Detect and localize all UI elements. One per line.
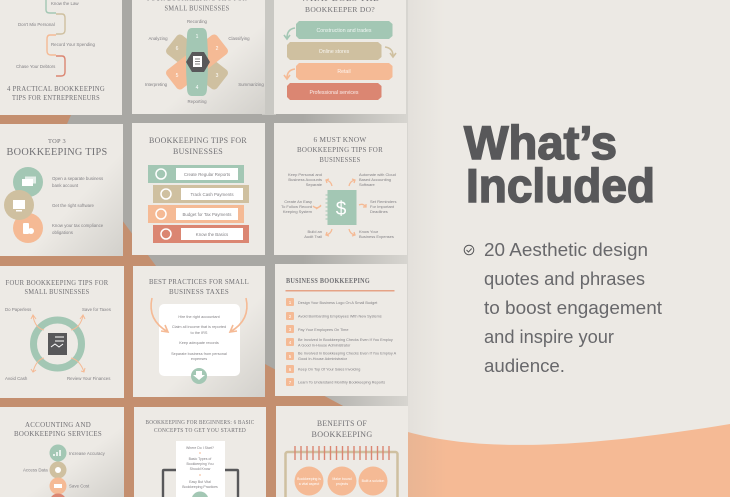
tip labels: Set Reminders: [370, 199, 396, 204]
title: FOUR BOOKKEEPING TIPS FOR: [6, 279, 109, 287]
timeline labels: Record Your Spending: [51, 42, 95, 47]
numbered list: 1: [289, 300, 292, 305]
benefit circles: [294, 466, 388, 496]
panel: best practices for small business taxes: [133, 266, 265, 397]
title: BOOKKEEPING: [312, 430, 372, 439]
panel: accounting and bookkeeping services: [0, 407, 124, 497]
white list card: Separate business from personal: [171, 352, 227, 356]
numbered list: 5: [289, 354, 292, 359]
curved arrows: [284, 28, 396, 79]
numbered list: Be Involved In Bookkeeping Checks Even If You Employ: [298, 338, 393, 342]
bar: cash payments: Track Cash Payments: [190, 192, 234, 197]
title: BENEFITS OF: [317, 419, 367, 428]
description text: quotes and phrases: [484, 269, 645, 289]
service labels: [23, 451, 106, 488]
title: BOOKKEEPING FOR BEGINNERS: 6 BASIC: [146, 420, 254, 426]
benefit circles: Bookkeeping is: [297, 477, 321, 481]
title: BOOKKEEPING TIPS FOR: [297, 145, 383, 154]
numbered list: 4: [289, 340, 292, 345]
notebook dollar icon: $: [336, 199, 347, 220]
cycle labels: Analyzing: [148, 36, 168, 41]
circle icons: [4, 167, 43, 243]
timeline labels: Don't Mix Personal: [18, 22, 55, 27]
title: BOOKKEEPING TIPS FOR: [149, 136, 247, 145]
numbered list: Pay Your Employees On Time: [298, 328, 348, 332]
cycle labels: Reporting: [187, 99, 207, 104]
white steps card: Where Do I Start?: [186, 446, 214, 450]
divider: [286, 290, 394, 292]
tips text: bank account: [52, 183, 79, 188]
title: BOOKKEEPING TIPS: [6, 147, 108, 158]
description text: audience.: [484, 356, 565, 376]
heading: What's Included: [464, 116, 655, 212]
corner labels: Review Your Finances: [67, 376, 111, 381]
bar: online stores: Online stores: [319, 49, 350, 55]
tip labels: Separate: [306, 182, 323, 187]
thumbnail grid: [0, 0, 408, 497]
panel: bookkeeping for beginners: [134, 407, 266, 497]
service labels: Save Cost: [69, 484, 90, 488]
service labels: Access Data: [23, 468, 48, 472]
title: BUSINESS BOOKKEEPING: [286, 277, 370, 285]
tip labels: Business Expenses: [359, 234, 394, 239]
title: [312, 419, 372, 439]
tip labels: [281, 172, 396, 239]
title: SMALL BUSINESSES: [24, 288, 90, 296]
tip labels: Keeping System: [283, 209, 313, 214]
description text: 20 Aesthetic design: [484, 240, 648, 260]
title: BUSINESS TAXES: [169, 287, 229, 296]
numbered list: Learn To Understand Monthly Bookkeeping Reports: [298, 380, 385, 384]
title: [297, 135, 383, 164]
description text: to boost engagement: [484, 298, 662, 318]
cycle diagram: 6: [176, 46, 179, 52]
spiral notepad: [286, 446, 398, 497]
white steps card: [176, 441, 225, 497]
service labels: Increase Accuracy: [69, 451, 106, 456]
numbered list: Be Involved In Bookkeeping Checks Even If You Employ A: [298, 352, 397, 356]
title: BUSINESSES: [173, 147, 223, 156]
numbered list: 3: [289, 327, 292, 332]
title: TIPS FOR ENTREPRENEURS: [12, 94, 100, 102]
bar: retail: Retail: [337, 69, 351, 75]
timeline labels: Chase Your Debtors: [16, 64, 56, 69]
tips text: Know your tax compliance: [52, 223, 104, 228]
white steps card: Easy But Vital: [189, 480, 211, 484]
panel: business bookkeeping: [275, 264, 407, 396]
white steps card: Bookkeeping You: [186, 462, 214, 466]
bar: regular reports: Create Regular Reports: [184, 172, 231, 177]
white list card: Keep adequate records: [179, 341, 219, 345]
tip labels: Keep Personal and: [288, 172, 322, 177]
tips text: Get the right software: [52, 203, 95, 208]
numbered list: Design Your Business Logo On A Small Budget: [298, 301, 378, 305]
bar: construction: Construction and trades: [316, 28, 372, 34]
heading: What's Included: What’s: [464, 116, 617, 169]
timeline path: [46, 0, 65, 76]
panel: what does a bookkeeper do: [274, 0, 406, 114]
cycle labels: Classifying: [228, 36, 250, 41]
numbered list: A Good In-House Administrator: [298, 344, 351, 348]
panel: benefits of bookkeeping: [276, 406, 408, 497]
tip labels: For Important: [370, 204, 395, 209]
benefit circles: Built a solution: [362, 479, 384, 483]
tips text: Open a separate business: [52, 176, 104, 181]
title: [147, 0, 247, 12]
title: BOOKKEEPING SERVICES: [14, 429, 102, 438]
cycle diagram: 3: [216, 73, 219, 79]
cycle diagram: 1: [196, 34, 199, 40]
tip labels: Business Accounts: [288, 177, 322, 182]
corner labels: Do Paperless: [5, 307, 32, 312]
white list card: expenses: [191, 357, 207, 361]
numbered list: 7: [289, 380, 292, 385]
title: ACCOUNTING AND: [25, 420, 91, 429]
tip labels: Know Your: [359, 229, 379, 234]
peach wave: [408, 424, 730, 497]
peach arrows: [313, 179, 366, 236]
title: 4 PRACTICAL BOOKKEEPING: [7, 85, 105, 93]
panel: four tips for small businesses: [0, 266, 124, 398]
title: [14, 420, 102, 438]
tip labels: Audit Trail: [304, 234, 322, 239]
title: [6, 279, 109, 296]
title: SMALL BUSINESSES: [164, 4, 230, 12]
cycle labels: Summarizing: [238, 82, 264, 87]
numbered list: 6: [289, 367, 292, 372]
corner labels: Avoid Cash: [5, 376, 28, 381]
tip labels: Automate with Cloud: [359, 172, 396, 177]
corner arrows: [31, 315, 85, 372]
panel: tips for businesses: [132, 123, 265, 255]
tip labels: Software: [359, 182, 376, 187]
description text: [484, 240, 662, 376]
cycle labels: Recording: [187, 19, 208, 24]
title: BEST PRACTICES FOR SMALL: [149, 277, 249, 286]
bar: tax payments: Budget for Tax Payments: [183, 212, 232, 217]
numbered list: Good In-House Administrator: [298, 357, 348, 361]
title: CONCEPTS TO GET YOU STARTED: [154, 428, 246, 434]
cycle labels: [145, 19, 264, 104]
curved arrows: [151, 298, 247, 332]
heading: What's Included: Included: [466, 159, 655, 212]
cycle diagram: 4: [196, 85, 199, 91]
title: BUSINESSES: [320, 155, 360, 164]
white list card: Claim all income that is reported: [172, 325, 226, 329]
tip labels: Based Accounting: [359, 177, 391, 182]
title: [6, 138, 108, 158]
down arrow button: [191, 368, 207, 384]
panel: accounting cycle: [132, 0, 265, 114]
title: TOP 3: [48, 138, 66, 145]
corner labels: Save for Taxes: [82, 307, 112, 312]
icon: check circle: [464, 245, 474, 255]
tip labels: Create An Easy: [284, 199, 312, 204]
tip labels: Build an: [308, 229, 322, 234]
numbered list: 2: [289, 314, 292, 319]
panel: top 3 bookkeeping tips: [0, 124, 123, 256]
white steps card: Should Know: [190, 467, 211, 471]
panel: 4 practical bookkeeping tips: [0, 0, 122, 115]
benefit circles: projects: [336, 482, 348, 486]
numbered list: Keep On Top Of Your Sales Invoicing: [298, 368, 360, 372]
cycle diagram: [164, 28, 230, 96]
numbered list: [286, 298, 397, 386]
description text: and inspire your: [484, 327, 614, 347]
white steps card: Basic Types of: [189, 457, 211, 461]
cycle diagram: 5: [176, 73, 179, 79]
white list card: to the IRS: [191, 331, 208, 335]
title: [149, 136, 247, 156]
benefit circles: a vital aspect: [299, 482, 319, 486]
laptop frame: [163, 470, 238, 497]
white list card: [159, 304, 240, 376]
bar: professional services: Professional services: [309, 90, 359, 96]
cycle diagram: 2: [216, 46, 219, 52]
ring and document icon: [34, 320, 82, 368]
tip labels: To Follow Record: [281, 204, 312, 209]
stacked circles: [50, 444, 66, 497]
tip labels: Deadlines: [370, 209, 388, 214]
white steps card: Bookkeeping Practices: [182, 485, 218, 489]
title: BOOKKEEPER DO?: [305, 5, 375, 14]
white list card: Hire the right accountant: [178, 315, 221, 319]
tips text: [52, 176, 104, 235]
bar: know the basics: Know the Basics: [196, 232, 229, 237]
timeline labels: [16, 1, 95, 69]
panel: 6 must know tips: [274, 123, 407, 255]
corner labels: [5, 307, 112, 381]
numbered list: Avoid Bombarding Employees With New Systems: [298, 314, 382, 318]
title: [149, 277, 249, 296]
benefit circles: Make bound: [332, 477, 352, 481]
timeline labels: Know the Law: [51, 1, 79, 6]
title: [301, 0, 379, 14]
title: [7, 85, 105, 102]
cycle labels: Interpreting: [145, 82, 168, 87]
title: 6 MUST KNOW: [314, 135, 367, 144]
title: [146, 420, 254, 434]
tips text: obligations: [52, 230, 74, 235]
